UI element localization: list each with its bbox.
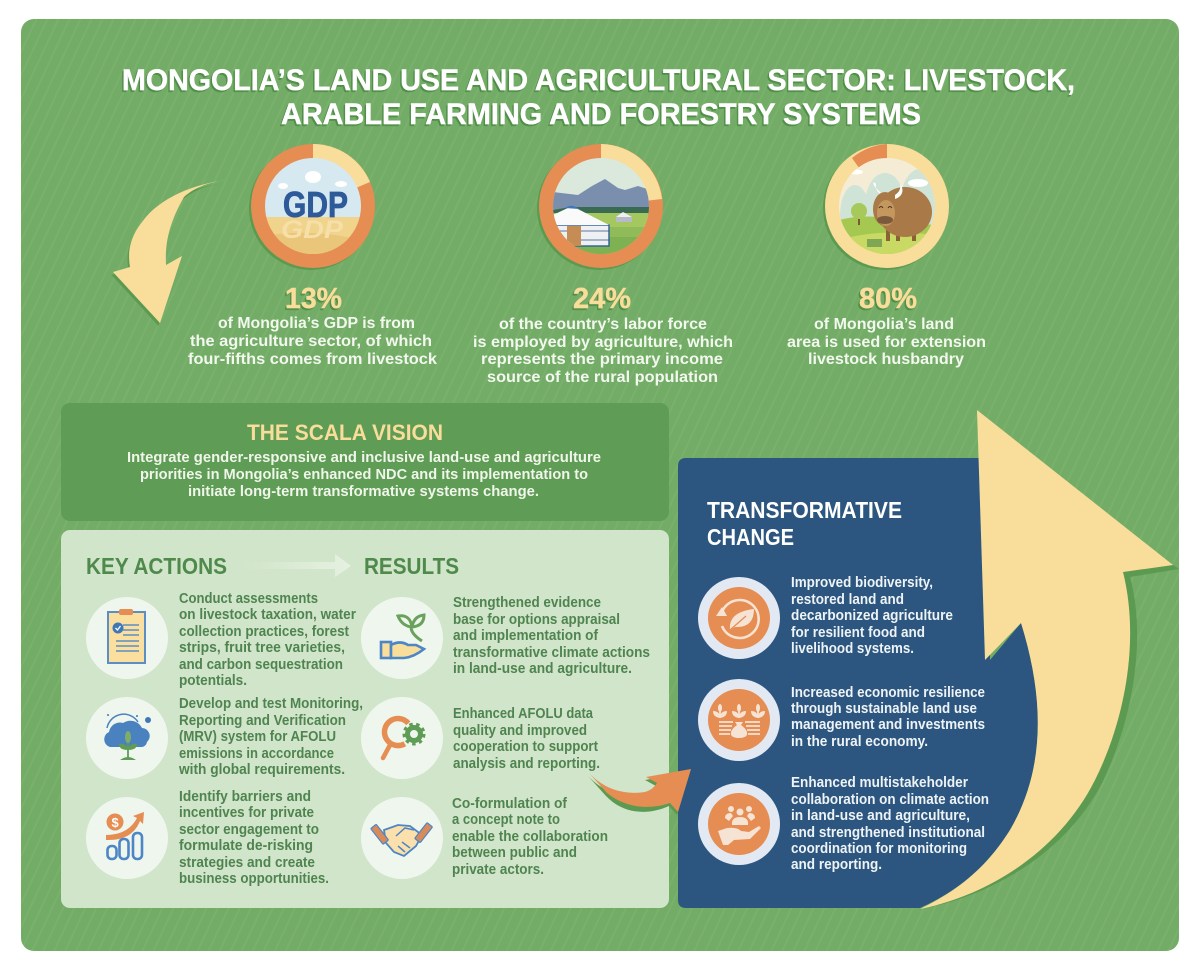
text: result 2: cooperation to support bbox=[453, 739, 598, 755]
icon: GDP donut: GDP bbox=[283, 184, 348, 225]
text: action 3: Identify barriers and bbox=[179, 789, 311, 805]
arrow: curved yellow down arrow bbox=[112, 180, 226, 326]
text: result 2 bbox=[453, 706, 600, 772]
stat: 13% GDP: four-fifths comes from livestock bbox=[188, 351, 437, 368]
text: action 2: with global requirements. bbox=[178, 762, 345, 778]
text: change 1: restored land and bbox=[791, 592, 904, 608]
text: action 3: formulate de-risking bbox=[179, 838, 313, 854]
text: change 2: in the rural economy. bbox=[791, 734, 928, 750]
icon: handshake bbox=[361, 797, 443, 879]
stat: 80% land area: livestock husbandry bbox=[808, 351, 964, 368]
stat: 80% land area: 80% bbox=[859, 283, 917, 315]
text: action 1: strips, fruit tree varieties, bbox=[179, 640, 345, 656]
text: action 3: sector engagement to bbox=[179, 822, 319, 838]
text: action 1: potentials. bbox=[179, 673, 247, 689]
text: change 2: management and investments bbox=[791, 717, 985, 733]
stat: 24% labor force: represents the primary income bbox=[481, 351, 723, 368]
icon: finance growth bbox=[86, 797, 168, 879]
text: change 3: and reporting. bbox=[791, 857, 882, 873]
panel: the SCALA vision bbox=[61, 403, 669, 521]
text: result 3: enable the collaboration bbox=[452, 829, 608, 845]
text: change 3: and strengthened institutional bbox=[791, 825, 985, 841]
text: vision statement: Integrate gender-responsive and inclusive land-use and agriculture bbox=[127, 450, 601, 466]
icon: clipboard bbox=[86, 597, 168, 679]
icon: cloud and plant bbox=[86, 697, 168, 779]
text: action 2: emissions in accordance bbox=[179, 746, 334, 762]
text: result 3: Co-formulation of bbox=[452, 796, 567, 812]
icon: yurt donut bbox=[537, 144, 663, 270]
text: result 3: private actors. bbox=[452, 862, 544, 878]
text: action 2 bbox=[178, 696, 363, 778]
icon: crops and money bbox=[698, 679, 780, 761]
heading: the SCALA vision: THE SCALA VISION bbox=[247, 420, 443, 445]
stat: 80% land area: area is used for extension bbox=[787, 334, 986, 351]
text: change 3: collaboration on climate action bbox=[791, 792, 989, 808]
text: change 2: Increased economic resilience bbox=[791, 685, 985, 701]
stat: 13% GDP: 13% bbox=[285, 283, 342, 315]
text: change 1: for resilient food and bbox=[791, 625, 925, 641]
text: result 1: Strengthened evidence bbox=[453, 595, 601, 611]
icon: hand with sprout bbox=[361, 597, 443, 679]
text: action 2: (MRV) system for AFOLU bbox=[179, 729, 336, 745]
text: action 1: collection practices, forest bbox=[179, 624, 349, 640]
text: result 1: and implementation of bbox=[453, 628, 598, 644]
text: result 1: base for options appraisal bbox=[453, 612, 620, 628]
title: ARABLE FARMING AND FORESTRY SYSTEMS bbox=[281, 98, 921, 131]
stat: 13% GDP: of Mongolia’s GDP is from bbox=[218, 315, 415, 332]
text: change 1 bbox=[791, 575, 953, 657]
heading: key actions: KEY ACTIONS bbox=[86, 553, 227, 579]
text: result 1 bbox=[453, 595, 650, 677]
text: result 3: between public and bbox=[452, 845, 577, 861]
stat: 13% GDP: the agriculture sector, of which bbox=[190, 333, 432, 350]
stat: 24% labor force: source of the rural population bbox=[487, 369, 718, 386]
stat: 24% labor force: of the country’s labor force bbox=[499, 316, 707, 333]
arrow: actions to results bbox=[240, 554, 351, 577]
text: action 1: and carbon sequestration bbox=[179, 657, 343, 673]
text: action 3: strategies and create bbox=[179, 855, 315, 871]
heading: transformative change: TRANSFORMATIVE bbox=[707, 497, 902, 523]
arrow: large yellow upward arrow bbox=[920, 410, 1179, 909]
icon: leaf cycle bbox=[698, 577, 780, 659]
icon: hand with people bbox=[698, 783, 780, 865]
icon: finance growth: $ bbox=[112, 815, 120, 830]
text: result 1: transformative climate actions bbox=[453, 645, 650, 661]
text: change 1: Improved biodiversity, bbox=[791, 575, 933, 591]
title bbox=[122, 64, 1075, 131]
text: change 3: in land-use and agriculture, bbox=[791, 808, 970, 824]
text: action 3 bbox=[179, 789, 329, 887]
text: result 2: Enhanced AFOLU data bbox=[453, 706, 594, 722]
stat: 24% labor force: is employed by agriculture, which bbox=[473, 334, 733, 351]
text: action 1: Conduct assessments bbox=[179, 591, 318, 607]
text: result 3: a concept note to bbox=[452, 812, 560, 828]
text: result 1: in land-use and agriculture. bbox=[453, 661, 632, 677]
text: change 2 bbox=[791, 685, 985, 750]
title: MONGOLIA’S LAND USE AND AGRICULTURAL SECTOR: LIVESTOCK, bbox=[122, 64, 1075, 97]
heading: results: RESULTS bbox=[364, 553, 459, 579]
text: action 1: on livestock taxation, water bbox=[179, 607, 356, 623]
text: vision statement: priorities in Mongolia’s enhanced NDC and its implementation to bbox=[140, 467, 588, 483]
icon: yak donut bbox=[823, 144, 949, 270]
text: action 2: Reporting and Verification bbox=[179, 713, 346, 729]
text: change 2: through sustainable land use bbox=[791, 701, 977, 717]
stat: 24% labor force bbox=[473, 283, 733, 386]
stat: 80% land area: of Mongolia’s land bbox=[814, 316, 954, 333]
text: action 2: Develop and test Monitoring, bbox=[179, 696, 363, 712]
text: action 3: business opportunities. bbox=[179, 871, 329, 887]
text: result 2: analysis and reporting. bbox=[453, 756, 600, 772]
text: change 3: coordination for monitoring bbox=[791, 841, 967, 857]
text: result 3 bbox=[452, 796, 608, 878]
stat: 13% GDP bbox=[188, 283, 437, 368]
text: action 3: incentives for private bbox=[179, 805, 314, 821]
icon: GDP donut bbox=[249, 144, 375, 270]
text: change 1: livelihood systems. bbox=[791, 641, 914, 657]
text: change 1: decarbonized agriculture bbox=[791, 608, 953, 624]
icon: magnifier and gear bbox=[361, 697, 443, 779]
stat: 24% labor force: 24% bbox=[573, 283, 631, 315]
panel: transformative change bbox=[678, 458, 1038, 908]
heading: transformative change: CHANGE bbox=[707, 524, 794, 550]
text: change 3 bbox=[791, 775, 989, 873]
stat: 80% land area bbox=[787, 283, 986, 368]
text: vision statement bbox=[127, 450, 601, 500]
heading: transformative change bbox=[707, 497, 902, 550]
text: result 2: quality and improved bbox=[453, 723, 587, 739]
arrow: orange results to change bbox=[588, 769, 691, 815]
text: action 1 bbox=[179, 591, 356, 689]
text: vision statement: initiate long-term transformative systems change. bbox=[188, 484, 539, 500]
icon: GDP donut: GDP bbox=[281, 216, 343, 244]
text: change 3: Enhanced multistakeholder bbox=[791, 775, 968, 791]
panel: key actions and results bbox=[61, 530, 669, 908]
